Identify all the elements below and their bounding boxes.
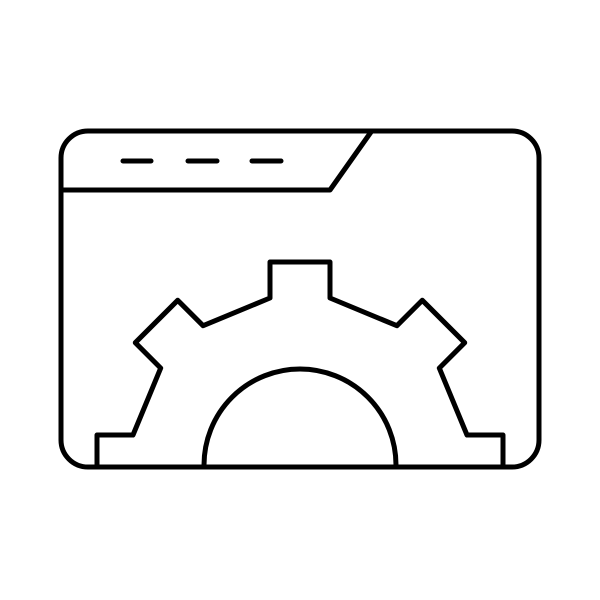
browser frame <box>61 131 539 467</box>
gear <box>97 262 503 465</box>
browser top bar <box>63 132 371 190</box>
address dashes <box>123 158 281 164</box>
gear hub <box>204 369 396 465</box>
icon: browser window with gear <box>61 131 539 467</box>
